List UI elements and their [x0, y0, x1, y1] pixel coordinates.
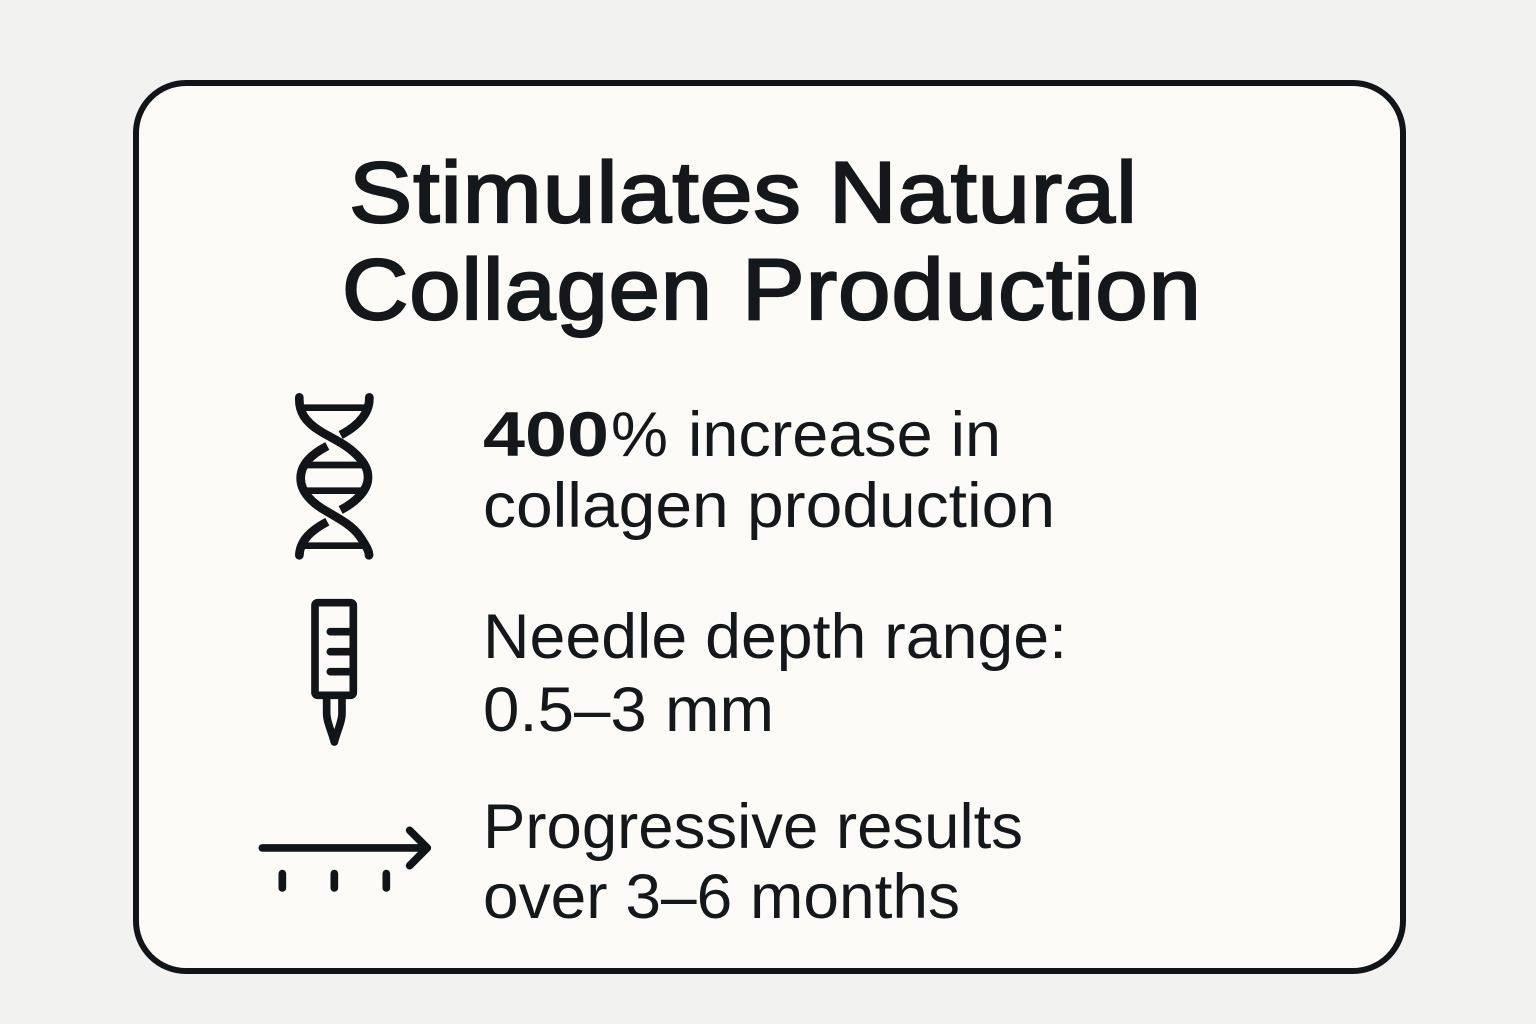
text: progressive results: Progressive results — [483, 792, 1023, 862]
title: Production — [742, 242, 1202, 338]
text: collagen increase: collagen production — [483, 471, 1055, 541]
text: collagen increase: % — [611, 400, 668, 470]
title — [342, 145, 1202, 338]
card panel — [136, 83, 1403, 971]
text: progressive results — [483, 792, 1023, 932]
text: collagen increase: 400 — [483, 400, 609, 470]
icon: timeline arrow — [262, 830, 427, 888]
text: needle depth: 0.5–3 mm — [483, 675, 774, 745]
text: needle depth — [483, 602, 1067, 745]
title: Stimulates — [349, 145, 802, 241]
title: Natural — [829, 145, 1138, 241]
text: collagen increase — [483, 400, 1055, 541]
icon: DNA helix — [295, 393, 374, 560]
text: collagen increase: increase in — [688, 400, 1001, 470]
text: progressive results: over 3–6 months — [483, 862, 960, 932]
title: Collagen — [342, 242, 713, 338]
text: needle depth: Needle depth range: — [483, 602, 1067, 672]
icon: microneedle — [315, 603, 353, 742]
